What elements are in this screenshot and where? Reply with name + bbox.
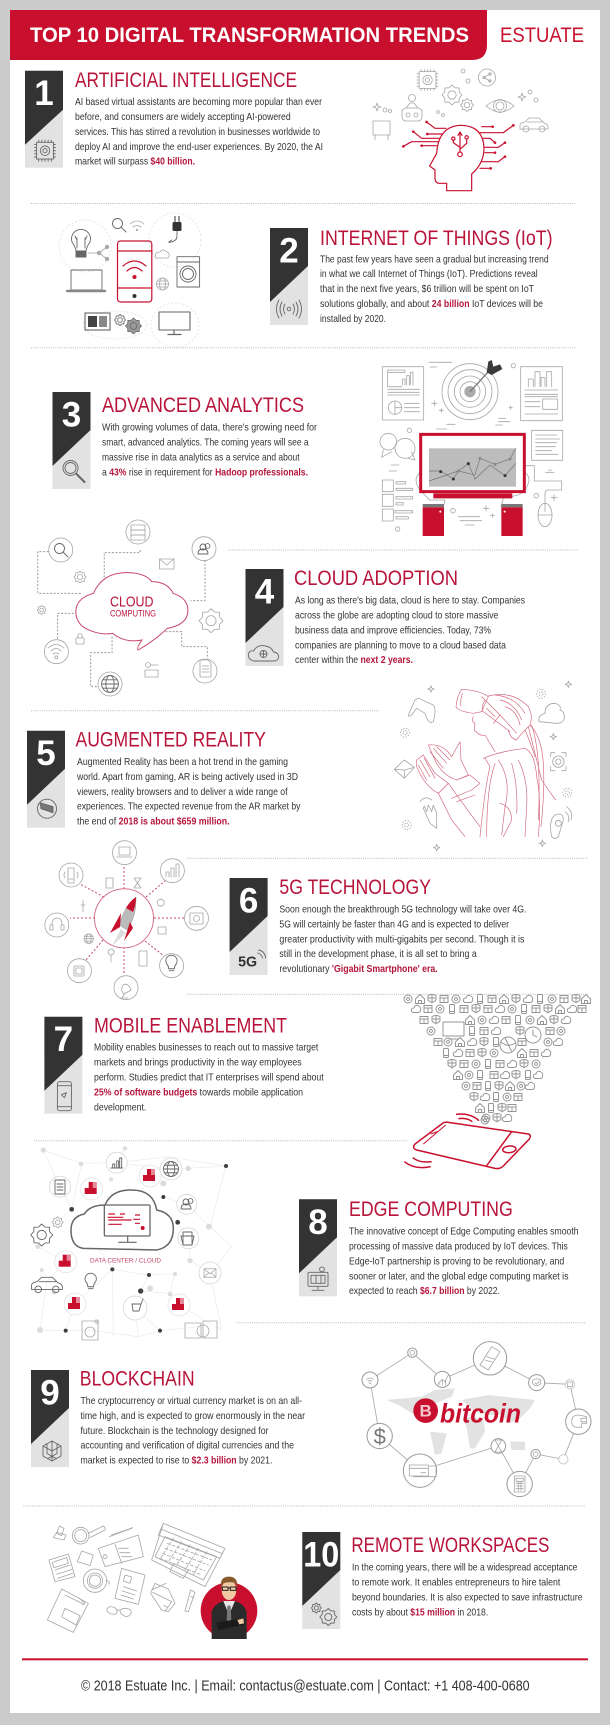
body text: future. Blockchain is the technology designed for (80, 1426, 269, 1437)
panel: 4 cloud adoption (37, 520, 525, 696)
body text: Edge-IoT partnership is proving to be revolutionary, and (349, 1256, 564, 1267)
body text (80, 1396, 305, 1467)
data center label: DATA CENTER / CLOUD (90, 1257, 161, 1264)
body text: As long as there's big data, cloud is here to stay. Companies (295, 596, 525, 607)
number badge 5 (27, 731, 65, 828)
body text: The past few years have seen a gradual but increasing trend (320, 254, 549, 265)
heading: REMOTE WORKSPACES (351, 1534, 549, 1557)
separator (187, 857, 588, 859)
body text: costs by about $15 million in 2018. (352, 1607, 488, 1618)
panel: 9 blockchain (31, 1342, 591, 1497)
header banner (10, 10, 584, 60)
body text: installed by 2020. (320, 314, 386, 325)
body text: center within the next 2 years. (295, 655, 413, 666)
panel: 2 internet of things (59, 213, 552, 347)
panel: 5 augmented reality (27, 681, 572, 851)
body text: deploy AI and improve the end-user experiences. By 2020, the AI (75, 142, 323, 153)
separator (187, 993, 588, 995)
number badge 7: 7 (54, 1020, 73, 1059)
number badge 10: 10 (303, 1536, 339, 1574)
number badge 1 (25, 71, 63, 168)
body text: business data and improve efficiencies. Today, 73% (295, 626, 491, 637)
number badge 4: 4 (255, 572, 275, 612)
body text: to remote work. It enables entrepreneurs to hire talent (352, 1578, 560, 1589)
number badge 1: 1 (34, 74, 54, 113)
number badge 8 (299, 1199, 337, 1296)
heading: INTERNET OF THINGS (IoT) (320, 227, 552, 250)
body text (295, 596, 525, 666)
cloud label: CLOUD (110, 594, 154, 611)
body text: market will surpass $40 billion. (75, 156, 195, 168)
illustration: woman wearing AR headset (394, 681, 572, 851)
heading: CLOUD ADOPTION (294, 567, 458, 590)
panel: 1 artificial intelligence (25, 69, 548, 191)
body text: time high, and is expected to grow enormously in the near (80, 1411, 305, 1422)
footer rule (22, 1658, 588, 1660)
body text: across the globe are adopting cloud to store massive (295, 611, 499, 622)
separator (228, 549, 578, 551)
body text: still in the development phase, it is all set to bring a (279, 949, 477, 960)
body text: 5G will certainly be faster than 4G and is expected to deliver (279, 919, 509, 930)
illustration: rocket hub with device icons (45, 841, 208, 1000)
body text: viewers, reality browsers and to deliver a wide range of (77, 787, 288, 798)
body text: perform. Studies predict that IT enterprises will spend about (94, 1073, 324, 1084)
illustration: AI head with circuits (373, 69, 548, 191)
body text: before, and consumers are widely accepting AI-powered (75, 112, 291, 123)
illustration: desk items and businessman (47, 1523, 257, 1639)
heading: MOBILE ENABLEMENT (94, 1015, 287, 1038)
panel: 6 5G technology (45, 841, 526, 1000)
footer contact line: © 2018 Estuate Inc. | Email: contactus@estuate.com | Contact: +1 408-400-0680 (81, 1679, 530, 1695)
body text: companies are planning to move to a cloud based data (295, 640, 506, 651)
separator (31, 202, 575, 204)
number badge 2 (270, 228, 308, 325)
body text: world. Apart from gaming, AR is being actively used in 3D (76, 772, 298, 783)
body text (75, 97, 323, 168)
illustration: IoT phone and devices (59, 213, 201, 347)
number badge 6 (230, 878, 268, 975)
body text (76, 757, 301, 827)
panel: 8 edge computing (31, 1146, 579, 1340)
body text: Mobility enables businesses to reach out to massive target (94, 1043, 318, 1054)
body text: The cryptocurrency or virtual currency market is on an all- (80, 1396, 302, 1407)
body text: markets and brings productivity in the way employees (94, 1058, 302, 1069)
number badge 10 (302, 1532, 340, 1629)
separator (23, 1505, 585, 1507)
body text (320, 254, 549, 325)
body text: market is expected to rise to $2.3 billion by 2021. (80, 1456, 272, 1467)
body text: 25% of software budgets towards mobile application (94, 1088, 303, 1099)
body text: expected to reach $6.7 billion by 2022. (349, 1286, 500, 1297)
illustration: icons pouring from smartphone (404, 994, 590, 1169)
body text: revolutionary 'Gigabit Smartphone' era. (279, 964, 438, 975)
body text: a 43% rise in requirement for Hadoop professionals. (102, 468, 308, 479)
heading: AUGMENTED REALITY (76, 729, 266, 752)
cloud sublabel: COMPUTING (110, 609, 156, 619)
dollar icon: $ (374, 1424, 386, 1449)
number badge 3: 3 (62, 396, 81, 434)
number badge 3 (52, 392, 90, 489)
heading: 5G TECHNOLOGY (279, 876, 431, 899)
title: TOP 10 DIGITAL TRANSFORMATION TRENDS (30, 24, 469, 47)
separator (31, 710, 379, 712)
body text (349, 1226, 579, 1297)
body text: processing of massive data produced by IoT devices. This (349, 1241, 568, 1252)
brand name: ESTUATE (500, 24, 584, 47)
panel: 7 mobile enablement (44, 994, 590, 1169)
body text: massive rise in data analytics as a service and about (102, 453, 300, 464)
body text (279, 904, 526, 975)
body text: that in the next five years, $6 trillion will be spent on IoT (320, 284, 535, 295)
body text: experiences. The expected revenue from the AR market by (77, 802, 301, 813)
body text: services. This has stirred a revolution in businesses worldwide to (75, 127, 320, 138)
separator (31, 347, 576, 349)
body text (102, 423, 317, 479)
heading: ADVANCED ANALYTICS (102, 394, 304, 417)
illustration: data center cloud network (31, 1146, 232, 1340)
body text: AI based virtual assistants are becoming more popular than ever (75, 97, 322, 108)
number badge 5: 5 (36, 734, 56, 773)
body text (94, 1043, 324, 1114)
number badge 9: 9 (40, 1374, 60, 1412)
number badge 2: 2 (279, 232, 299, 270)
number badge 6: 6 (239, 882, 258, 920)
panel: 10 remote workspaces (47, 1523, 583, 1639)
body text: accounting and verification of digital currencies and the (80, 1441, 294, 1452)
illustration: bitcoin network over world map (362, 1342, 591, 1497)
body text: sooner or later, and the global edge computing market is (349, 1271, 568, 1282)
body text: Augmented Reality has been a hot trend in the gaming (77, 757, 288, 768)
number badge 7 (44, 1017, 82, 1114)
separator (237, 1322, 586, 1324)
number badge 4 (246, 569, 284, 666)
bitcoin B mark: B (420, 1402, 432, 1420)
number badge 8: 8 (308, 1203, 328, 1242)
heading: BLOCKCHAIN (80, 1368, 195, 1391)
body text: development. (94, 1103, 146, 1114)
body text: greater productivity with multi-gigabits per second. Though it is (279, 934, 524, 945)
separator (34, 1140, 408, 1142)
body text: solutions globally, and about 24 billion IoT devices will be (320, 299, 543, 310)
panel: 3 advanced analytics (52, 360, 563, 536)
number badge 6: 5G (238, 954, 257, 970)
illustration: analytics dashboard (380, 360, 563, 536)
body text (352, 1563, 583, 1618)
bitcoin wordmark: bitcoin (440, 1398, 521, 1428)
body text: the end of 2018 is about $659 million. (77, 816, 230, 827)
number badge 9 (31, 1370, 69, 1467)
body text: smart, advanced analytics. The coming years will see a (102, 438, 309, 449)
body text: Soon enough the breakthrough 5G technology will take over 4G. (279, 904, 526, 915)
body text: in what we call Internet of Things (IoT). Predictions reveal (320, 269, 538, 280)
heading: ARTIFICIAL INTELLIGENCE (75, 69, 297, 92)
heading: EDGE COMPUTING (349, 1198, 513, 1221)
illustration: cloud computing network (37, 520, 223, 696)
body text: With growing volumes of data, there's growing need for (102, 423, 317, 434)
